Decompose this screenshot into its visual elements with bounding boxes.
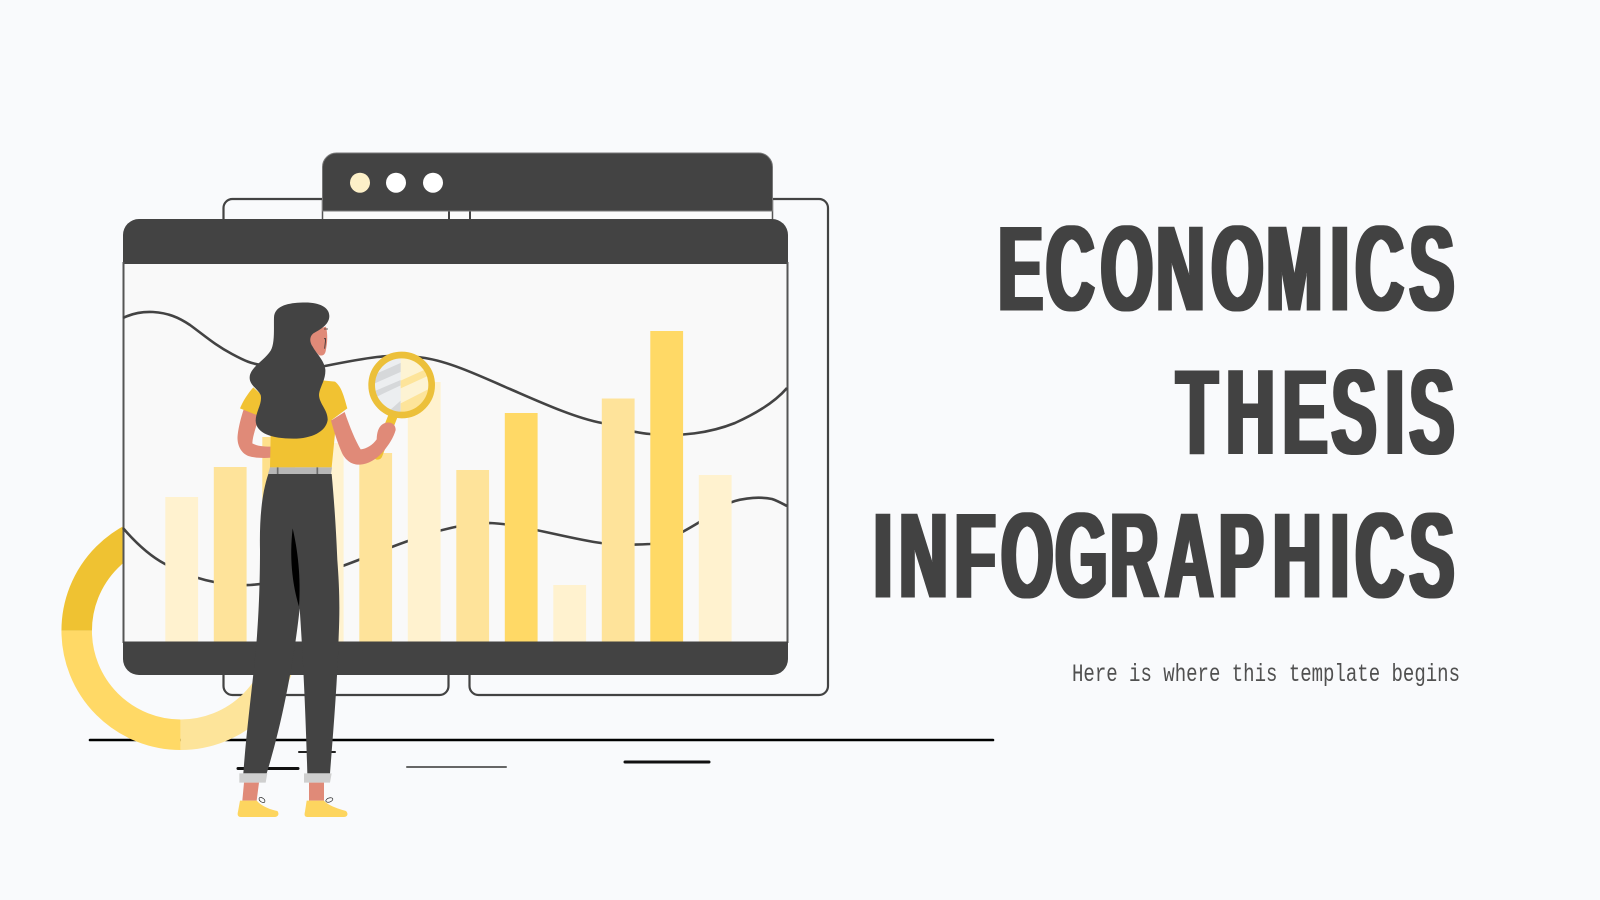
pants shadow <box>291 528 300 607</box>
shoes <box>238 801 347 817</box>
bar chart <box>165 331 732 642</box>
trend curve upper <box>123 312 787 435</box>
upper body <box>237 302 432 474</box>
left arm <box>237 408 273 458</box>
cuffs <box>239 773 332 783</box>
face <box>309 327 328 356</box>
title line 2: THESIS <box>1177 344 1454 480</box>
subtitle: Here is where this template begins <box>1072 660 1460 689</box>
right arm <box>331 412 396 465</box>
title line 3: INFOGRAPHICS <box>874 487 1454 623</box>
hair <box>250 302 329 439</box>
front browser window <box>123 219 788 675</box>
belt <box>268 467 332 474</box>
trend curve lower <box>123 498 787 585</box>
infographic slide <box>61 152 1458 817</box>
ankles <box>242 783 324 801</box>
legs and shoes <box>238 474 347 817</box>
window footer bar <box>123 642 788 660</box>
title <box>874 200 1454 623</box>
back browser title bar <box>322 153 772 220</box>
window buttons <box>350 173 443 193</box>
shirt <box>240 380 347 467</box>
title line 1: ECONOMICS <box>998 200 1454 337</box>
magnifier handle <box>378 413 394 455</box>
shoelaces <box>258 796 333 804</box>
magnifying glass <box>372 355 432 415</box>
back window outlines <box>224 199 828 695</box>
pants <box>243 474 339 773</box>
woman figure <box>237 302 432 817</box>
ground lines <box>90 740 993 768</box>
donut ring chart <box>77 527 285 735</box>
